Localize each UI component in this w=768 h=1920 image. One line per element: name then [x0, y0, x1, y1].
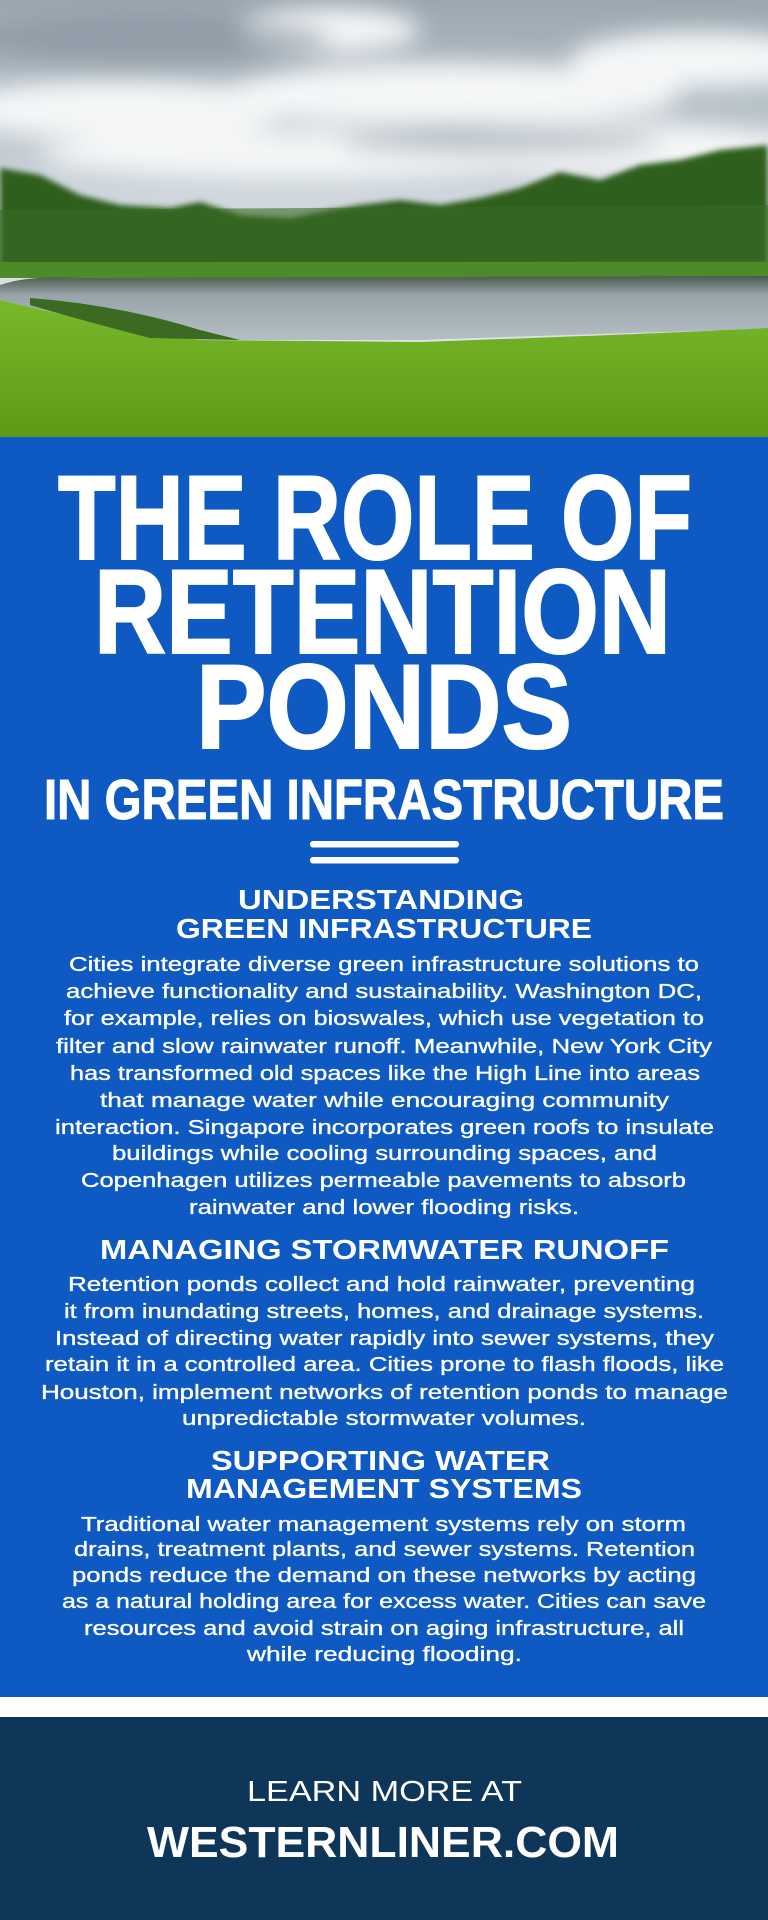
heading: managing stormwater runoff: MANAGING STORMWATER RUNOFF — [100, 1234, 669, 1265]
body text: managing stormwater runoff: it from inundating streets, homes, and drainage systems. — [64, 1301, 704, 1323]
body text: supporting water management systems — [62, 1514, 706, 1666]
divider bars — [310, 841, 459, 864]
body text: supporting water management systems: resources and avoid strain on aging infrastructure, all — [84, 1618, 684, 1640]
body text: supporting water management systems: drains, treatment plants, and sewer systems. Retention — [74, 1539, 695, 1561]
body text: supporting water management systems: ponds reduce the demand on these networks by acting — [72, 1565, 696, 1587]
body text: managing stormwater runoff: Houston, implement networks of retention ponds to manage — [41, 1382, 728, 1404]
heading: understanding green infrastructure: UNDERSTANDING — [238, 884, 524, 915]
footer panel — [0, 1717, 768, 1920]
body text: understanding green infrastructure: buildings while cooling surrounding spaces, and — [112, 1143, 657, 1165]
body text: understanding green infrastructure: Copenhagen utilizes permeable pavements to absorb — [81, 1170, 686, 1192]
photo: retention pond landscape — [0, 0, 768, 437]
body text: understanding green infrastructure: that manage water while encouraging community — [100, 1090, 669, 1112]
heading: supporting water management systems — [186, 1445, 582, 1504]
body text: understanding green infrastructure: for example, relies on bioswales, which use vegetation to — [64, 1008, 704, 1030]
title: RETENTION — [94, 545, 671, 679]
body text: understanding green infrastructure: achieve functionality and sustainability. Washington DC, — [66, 981, 702, 1003]
heading: supporting water management systems: MANAGEMENT SYSTEMS — [186, 1473, 582, 1504]
heading: understanding green infrastructure — [176, 884, 592, 944]
body text: supporting water management systems: as a natural holding area for excess water. Cities can save — [62, 1591, 706, 1613]
body text: managing stormwater runoff: Retention ponds collect and hold rainwater, preventing — [68, 1274, 695, 1296]
body text: managing stormwater runoff — [41, 1274, 728, 1430]
heading: supporting water management systems: SUPPORTING WATER — [211, 1445, 550, 1476]
body text: managing stormwater runoff: Instead of directing water rapidly into sewer systems, they — [55, 1328, 714, 1350]
blue content panel — [0, 437, 768, 1697]
title: PONDS — [196, 640, 572, 774]
body text: understanding green infrastructure: filter and slow rainwater runoff. Meanwhile, New York City — [56, 1036, 712, 1058]
body text: understanding green infrastructure: Cities integrate diverse green infrastructure solutions to — [69, 954, 699, 976]
body text: supporting water management systems: while reducing flooding. — [246, 1644, 522, 1666]
title — [44, 451, 724, 832]
body text: understanding green infrastructure: has transformed old spaces like the High Line into areas — [70, 1063, 700, 1085]
body text: managing stormwater runoff: retain it in a controlled area. Cities prone to flash floods, like — [45, 1354, 724, 1376]
body text: managing stormwater runoff: unpredictable stormwater volumes. — [182, 1408, 586, 1430]
body text: understanding green infrastructure: interaction. Singapore incorporates green roofs to insulate — [55, 1117, 714, 1139]
body text: supporting water management systems: Traditional water management systems rely on storm — [81, 1514, 686, 1536]
footer: website: WESTERNLINER.COM — [147, 1818, 619, 1867]
footer: learn more at: LEARN MORE AT — [247, 1776, 522, 1808]
body text: understanding green infrastructure: rainwater and lower flooding risks. — [189, 1197, 579, 1219]
body text: understanding green infrastructure — [55, 954, 714, 1219]
heading: understanding green infrastructure: GREEN INFRASTRUCTURE — [176, 913, 592, 944]
